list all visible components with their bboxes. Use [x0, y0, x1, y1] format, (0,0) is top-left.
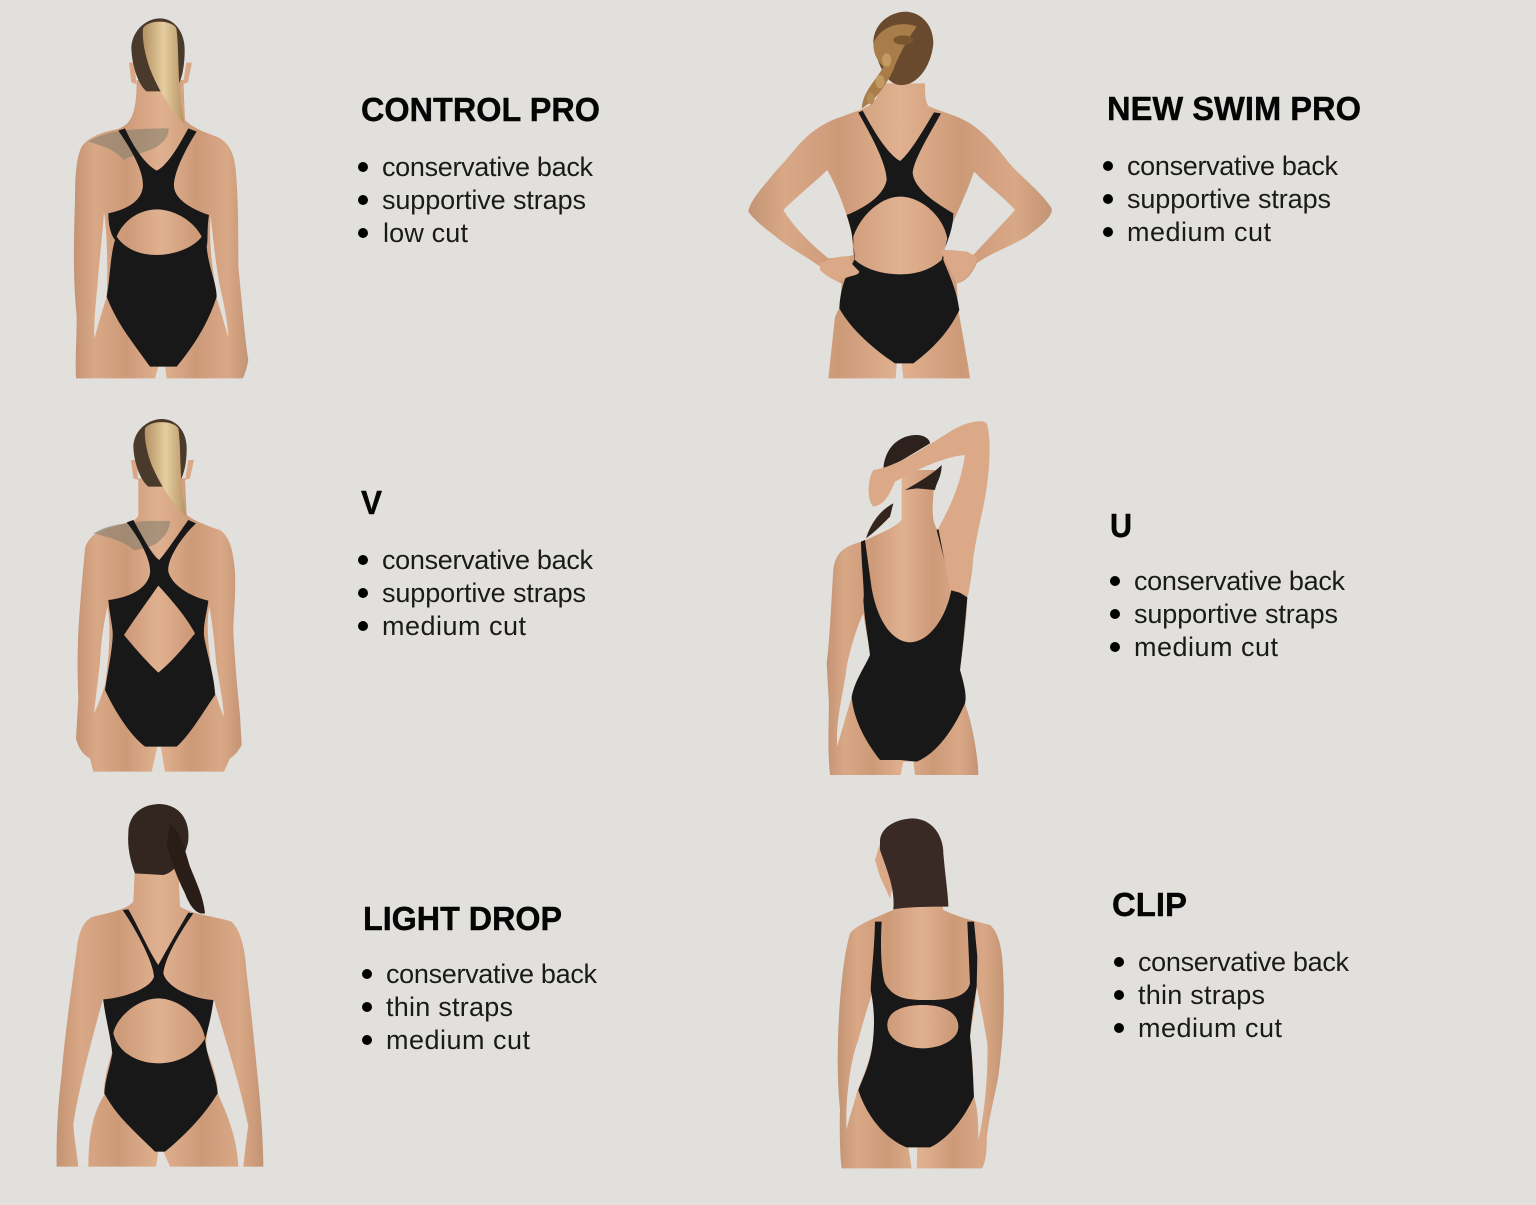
feature list: low cut — [383, 218, 468, 248]
feature list — [1103, 151, 1338, 247]
figure: light drop swimsuit — [57, 804, 263, 1167]
heading: U — [1110, 507, 1132, 544]
feature list: conservative back — [386, 959, 598, 989]
feature list — [358, 152, 594, 248]
feature list: supportive straps — [1134, 599, 1338, 629]
heading: NEW SWIM PRO — [1107, 90, 1361, 127]
feature list: conservative back — [382, 545, 594, 575]
feature list: supportive straps — [1127, 184, 1331, 214]
feature list: conservative back — [1127, 151, 1338, 181]
feature list: medium cut — [1127, 217, 1271, 247]
heading: CONTROL PRO — [361, 91, 600, 128]
panel: clip — [838, 818, 1350, 1168]
panel: u — [827, 421, 1346, 775]
heading: CLIP — [1112, 886, 1187, 923]
feature list: conservative back — [1138, 947, 1350, 977]
feature list: medium cut — [386, 1025, 530, 1055]
heading: V — [361, 484, 382, 521]
feature list — [362, 959, 598, 1055]
panel: control pro — [74, 18, 600, 378]
feature list: supportive straps — [382, 185, 586, 215]
feature list: thin straps — [1138, 980, 1265, 1010]
feature list: conservative back — [382, 152, 594, 182]
figure: clip swimsuit — [838, 818, 1004, 1168]
panel: light drop — [57, 804, 597, 1167]
heading: LIGHT DROP — [363, 900, 562, 937]
feature list — [1114, 947, 1350, 1043]
feature list: medium cut — [1138, 1013, 1282, 1043]
panel: v — [76, 419, 594, 772]
feature list — [358, 545, 594, 641]
feature list: thin straps — [386, 992, 513, 1022]
figure: u swimsuit — [827, 421, 990, 775]
panel: new swim pro — [748, 12, 1361, 378]
feature list: medium cut — [382, 611, 526, 641]
figure: new swim pro swimsuit — [748, 12, 1052, 378]
feature list: supportive straps — [382, 578, 586, 608]
feature list: medium cut — [1134, 632, 1278, 662]
feature list: conservative back — [1134, 566, 1346, 596]
figure: control pro swimsuit — [74, 18, 248, 378]
figure: v swimsuit — [76, 419, 242, 772]
feature list — [1110, 566, 1346, 662]
